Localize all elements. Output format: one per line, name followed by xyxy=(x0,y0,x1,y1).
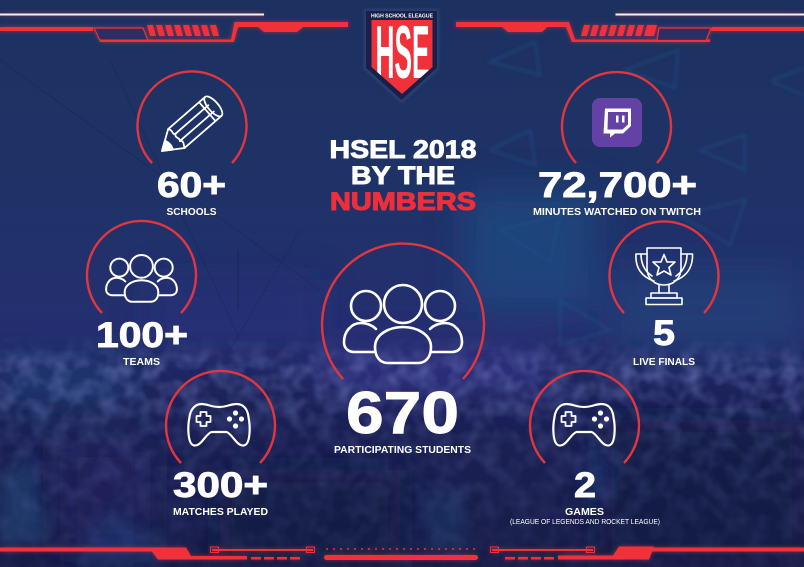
stat: live finals: 5 xyxy=(653,314,675,353)
icon: game controller xyxy=(553,404,615,446)
stat: games: (LEAGUE OF LEGENDS AND ROCKET LEAGUE) xyxy=(510,517,660,526)
stat: live finals: LIVE FINALS xyxy=(633,356,695,368)
bottom decoration right xyxy=(490,546,804,560)
top decoration left xyxy=(0,14,348,42)
stat: matches played xyxy=(166,371,275,518)
icon: people large xyxy=(344,285,462,363)
icon: trophy xyxy=(636,248,693,304)
stat: twitch minutes: 72,700+ xyxy=(538,166,697,205)
stat: participating students xyxy=(322,244,484,456)
stat: twitch minutes: MINUTES WATCHED ON TWITCH xyxy=(533,206,701,218)
top decoration right xyxy=(456,14,804,42)
bottom decoration left xyxy=(0,547,314,560)
logo: HSE shield xyxy=(364,9,439,103)
stat: participating students: PARTICIPATING STUDENTS xyxy=(334,444,471,456)
stat: teams xyxy=(87,221,196,368)
stat: twitch minutes xyxy=(533,72,701,218)
icon: twitch xyxy=(592,98,642,147)
stat: matches played: MATCHES PLAYED xyxy=(173,506,268,518)
stat: participating students: 670 xyxy=(346,380,459,446)
bottom decoration center xyxy=(324,548,478,560)
stat: schools: SCHOOLS xyxy=(166,206,216,218)
stat: matches played: 300+ xyxy=(173,466,268,505)
stat: games: GAMES xyxy=(565,506,604,518)
icon: game controller xyxy=(188,404,250,446)
icon: people xyxy=(106,255,177,302)
stat: games xyxy=(510,371,660,526)
stat: schools: 60+ xyxy=(157,166,226,205)
logo: HSE shield: HSE xyxy=(376,10,429,95)
title: HSEL 2018 xyxy=(330,136,477,164)
title: NUMBERS xyxy=(330,188,476,216)
icon: pencil xyxy=(154,94,225,160)
stat: teams: 100+ xyxy=(96,316,188,355)
logo league name: HIGH SCHOOL ELEAGUE xyxy=(371,14,433,20)
stat: schools xyxy=(138,71,247,218)
stat: teams: TEAMS xyxy=(123,356,160,368)
stat: games: 2 xyxy=(574,466,596,505)
stat: live finals xyxy=(610,221,718,368)
title xyxy=(330,136,477,216)
title: BY THE xyxy=(351,162,455,190)
